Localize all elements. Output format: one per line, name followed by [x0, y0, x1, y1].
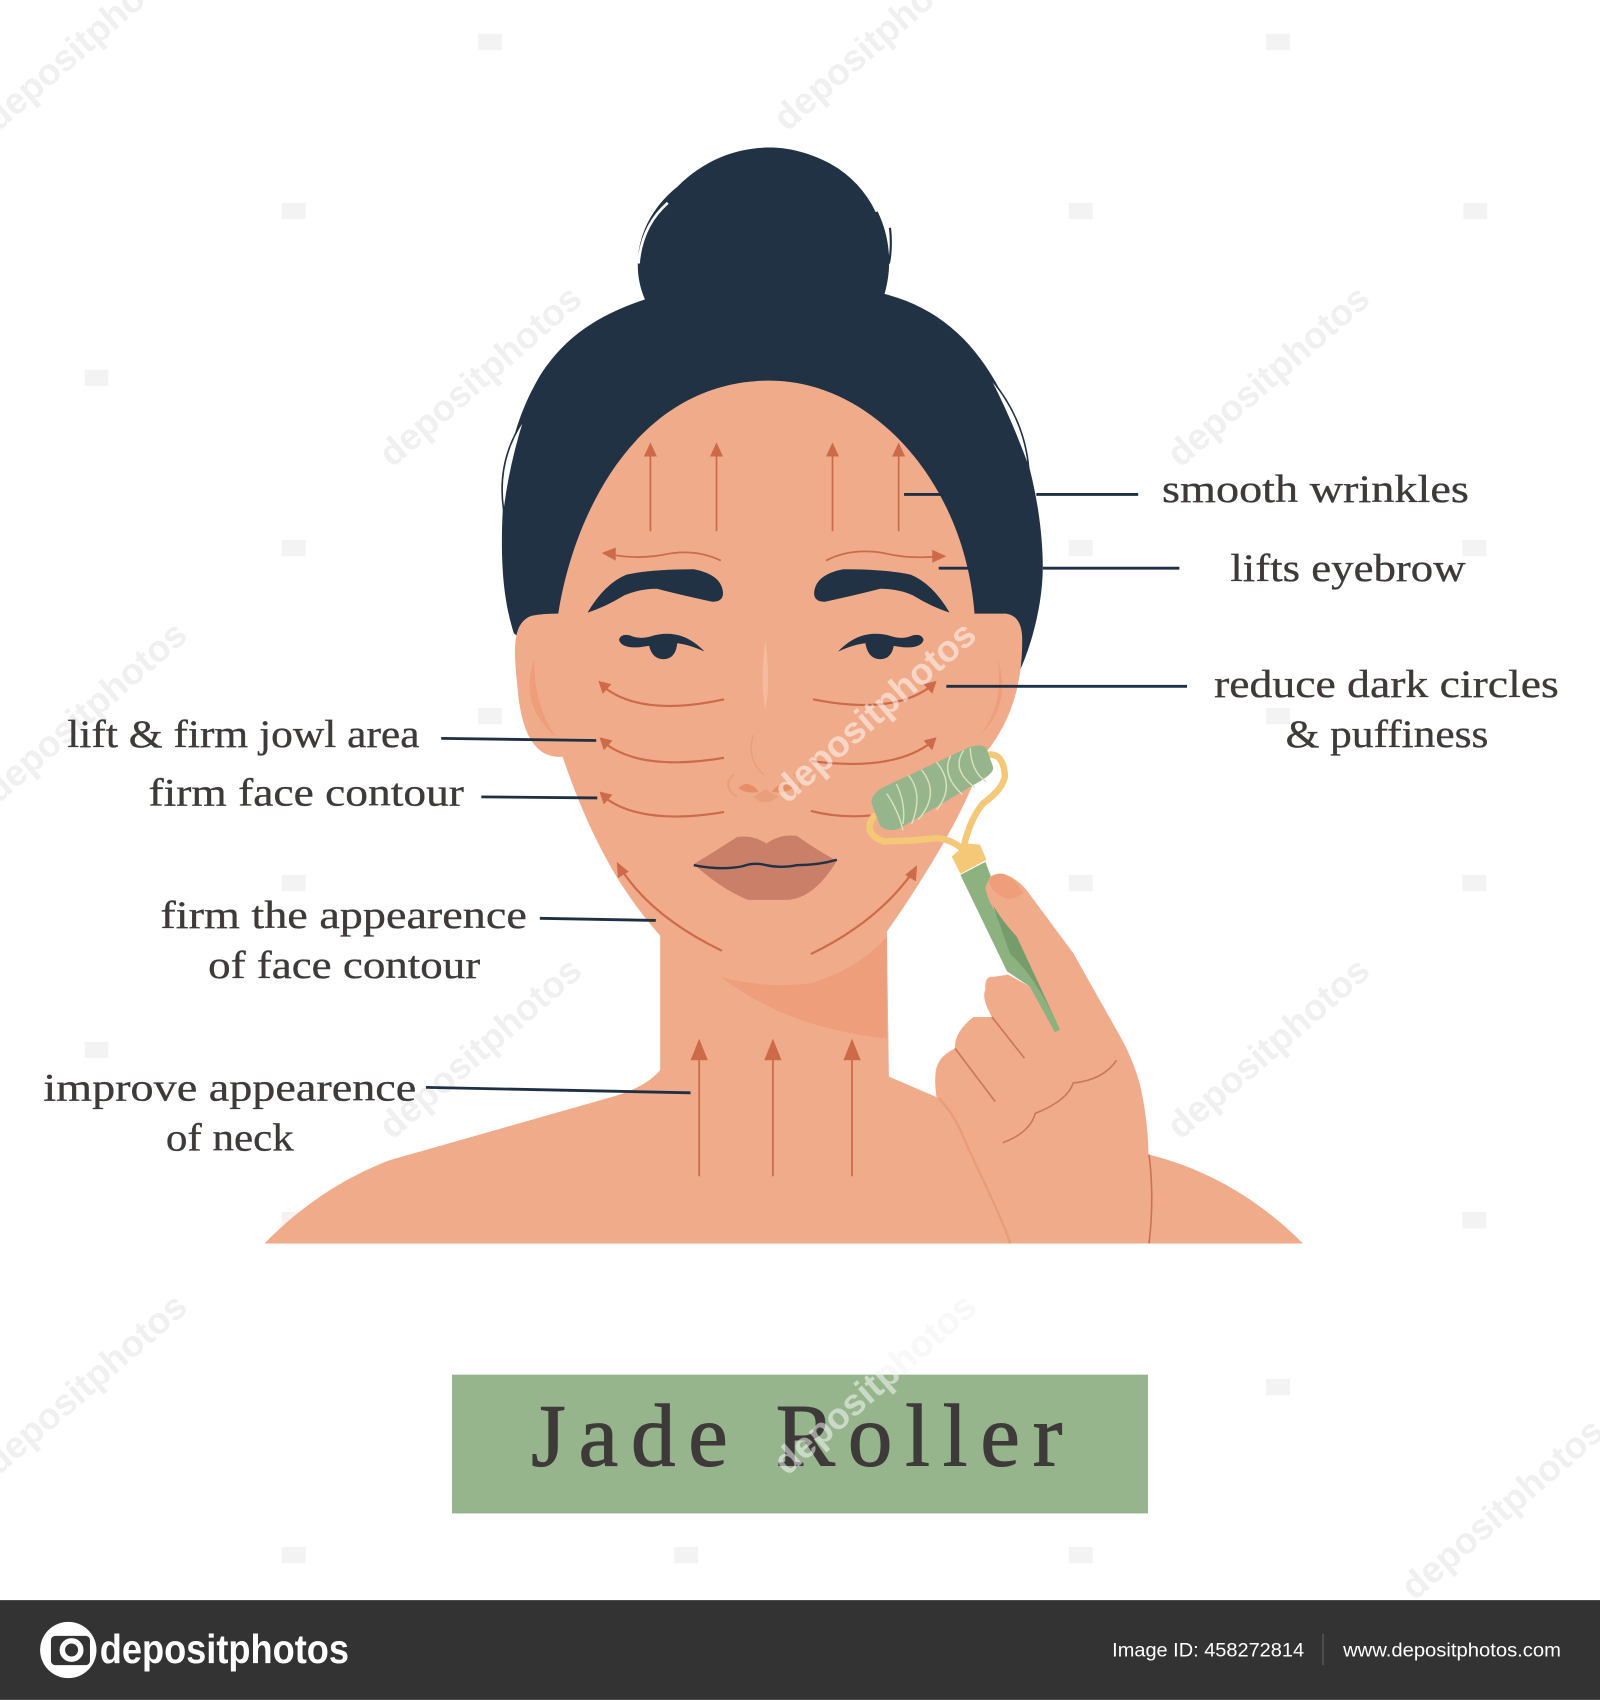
hair and bun — [502, 148, 1043, 674]
footer image id: Image ID: 458272814 — [1112, 1640, 1304, 1662]
face with ears — [515, 381, 1022, 984]
watermark camera marks — [85, 34, 1487, 1563]
massage direction arrows — [602, 453, 939, 1176]
label: improve appearence of neck — [43, 1066, 416, 1159]
handle — [960, 862, 1060, 1032]
neck shadow — [721, 937, 887, 1039]
icon: depositphotos logo — [40, 1622, 96, 1678]
roller frame — [869, 755, 1005, 850]
title banner — [452, 1375, 1148, 1513]
nose — [728, 640, 800, 802]
watermark pattern: depositphotos — [1159, 949, 1377, 1147]
label: improve appearence of neck: of neck — [166, 1116, 294, 1159]
label: improve appearence of neck: improve appearence — [43, 1066, 416, 1109]
pointer lines — [426, 494, 1187, 1093]
watermark over illustration — [765, 613, 984, 1483]
watermark pattern: depositphotos — [1159, 277, 1377, 474]
label: reduce dark circles & puffiness — [1214, 663, 1559, 756]
watermark pattern: depositphotos — [371, 949, 589, 1147]
label: lift & firm jowl area: lift & firm jowl area — [67, 713, 420, 756]
eyes — [619, 634, 924, 659]
watermark pattern: depositphotos — [765, 1285, 984, 1483]
label: firm the appearence of face contour — [160, 894, 527, 987]
title banner: Jade Roller — [531, 1388, 1062, 1486]
hand — [935, 874, 1152, 1243]
label: smooth wrinkles: smooth wrinkles — [1162, 468, 1469, 511]
footer logo text: depositphotos — [100, 1626, 349, 1672]
label: firm the appearence of face contour: firm the appearence — [160, 894, 527, 937]
ear shadows — [530, 657, 1002, 737]
label: firm the appearence of face contour: of face contour — [208, 944, 480, 987]
watermark over illustration: depositphotos — [765, 1285, 984, 1483]
roller head — [871, 745, 993, 830]
lips — [694, 836, 837, 900]
label: reduce dark circles & puffiness: & puffiness — [1286, 713, 1488, 756]
eyebrows — [588, 569, 950, 613]
figure: woman with jade roller — [264, 148, 1303, 1243]
watermark pattern: depositphotos — [371, 277, 589, 474]
watermark over illustration: depositphotos — [765, 613, 984, 811]
footer website: www.depositphotos.com — [1342, 1640, 1561, 1662]
jade roller — [869, 745, 1060, 1032]
label: reduce dark circles & puffiness: reduce dark circles — [1214, 663, 1559, 706]
fingernail — [989, 874, 1023, 899]
neck and shoulders — [264, 922, 1303, 1243]
arrowheads — [598, 442, 946, 1060]
label: lifts eyebrow: lifts eyebrow — [1230, 547, 1466, 590]
label: firm face contour: firm face contour — [149, 772, 464, 815]
footer bar — [0, 1600, 1600, 1700]
